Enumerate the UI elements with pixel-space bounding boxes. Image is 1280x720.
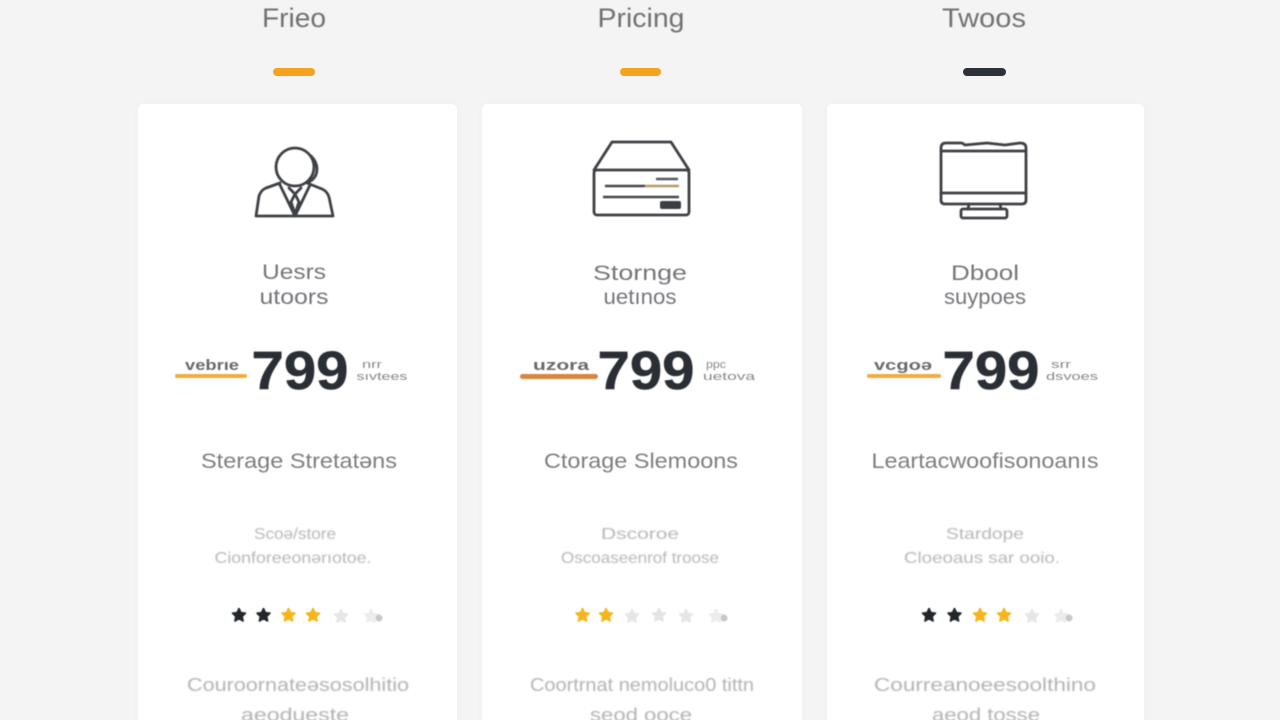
label: Users: utoors: [260, 286, 328, 309]
star rating: [232, 608, 382, 622]
panel: support plan column: [827, 3, 1144, 720]
price qualifier with orange underline: [520, 358, 598, 379]
price block: [867, 341, 1099, 401]
price period: [356, 359, 408, 383]
price period: dsvoes: [1046, 371, 1099, 383]
description: Cloeoaus sar ooio.: [904, 550, 1060, 567]
price number: 799: [942, 341, 1040, 401]
label: Storage: uetınos: [604, 286, 676, 309]
label: Storage: Stornge: [593, 262, 687, 285]
card: storage plan: [482, 104, 802, 720]
heading: Frieo: Frieo: [262, 3, 326, 33]
label: Users: Uesrs: [262, 261, 326, 284]
heading: Pricing: Pricing: [598, 3, 684, 33]
description: [214, 526, 372, 567]
description: Scoə/store: [254, 526, 336, 543]
star rating: [922, 608, 1072, 622]
description: Cionforeeonərıotoe.: [214, 550, 372, 567]
panel: storage plan column: [482, 3, 802, 720]
label: Users: [260, 261, 328, 309]
price period: [1046, 359, 1099, 383]
footer text: [187, 675, 409, 720]
price block: [520, 341, 756, 401]
price period: sıvtees: [356, 371, 408, 383]
price number: 799: [598, 341, 694, 401]
accent bar: dark: [963, 68, 1006, 76]
label: Dboou: [944, 262, 1026, 309]
feature title: Leartacwoofisonoanıs: [872, 450, 1098, 473]
price block: [175, 341, 408, 401]
icon: person with headset: [256, 148, 333, 216]
price period: srr: [1051, 359, 1072, 371]
price number: 799: [252, 341, 348, 401]
footer text: Coortrnat nemoluco0 tittn: [530, 675, 754, 695]
footer text: [530, 675, 754, 720]
label: Dboou: suypoes: [944, 286, 1026, 309]
description: Oscoaseenrof troose: [561, 550, 719, 567]
feature title: Ctorage Slemoons: [544, 450, 738, 473]
card: free plan: [138, 104, 457, 720]
star rating: [576, 608, 728, 622]
description: [904, 526, 1060, 567]
price qualifier with orange underline: [867, 358, 941, 378]
price qualifier with orange underline: uzora: [533, 358, 590, 374]
price period: [703, 359, 756, 383]
price qualifier with orange underline: vebrıe: [185, 358, 239, 374]
description: [561, 526, 719, 567]
label: Storage: [593, 262, 687, 309]
description: Stardope: [946, 526, 1024, 543]
accent bar: orange: [620, 68, 661, 76]
description: Dscoroe: [601, 526, 679, 543]
label: Dboou: Dbool: [951, 262, 1019, 285]
card: support plan: [827, 104, 1144, 720]
accent bar: orange: [273, 68, 315, 76]
price qualifier with orange underline: vcgoə: [874, 358, 932, 374]
price period: ppc: [706, 359, 727, 371]
icon: storage box: [594, 142, 689, 215]
price period: uetova: [703, 371, 756, 383]
footer text: Couroornateəsosolhitio: [187, 675, 409, 695]
icon: monitor: [941, 143, 1026, 218]
footer text: [874, 675, 1096, 720]
price qualifier with orange underline: [175, 358, 247, 378]
heading: Twoos: Twoos: [942, 3, 1026, 33]
footer text: Courreanoeesoolthino: [874, 675, 1096, 695]
feature title: Sterage Stretatəns: [201, 450, 397, 473]
panel: free plan column: [138, 3, 457, 720]
price period: nrr: [362, 359, 382, 371]
